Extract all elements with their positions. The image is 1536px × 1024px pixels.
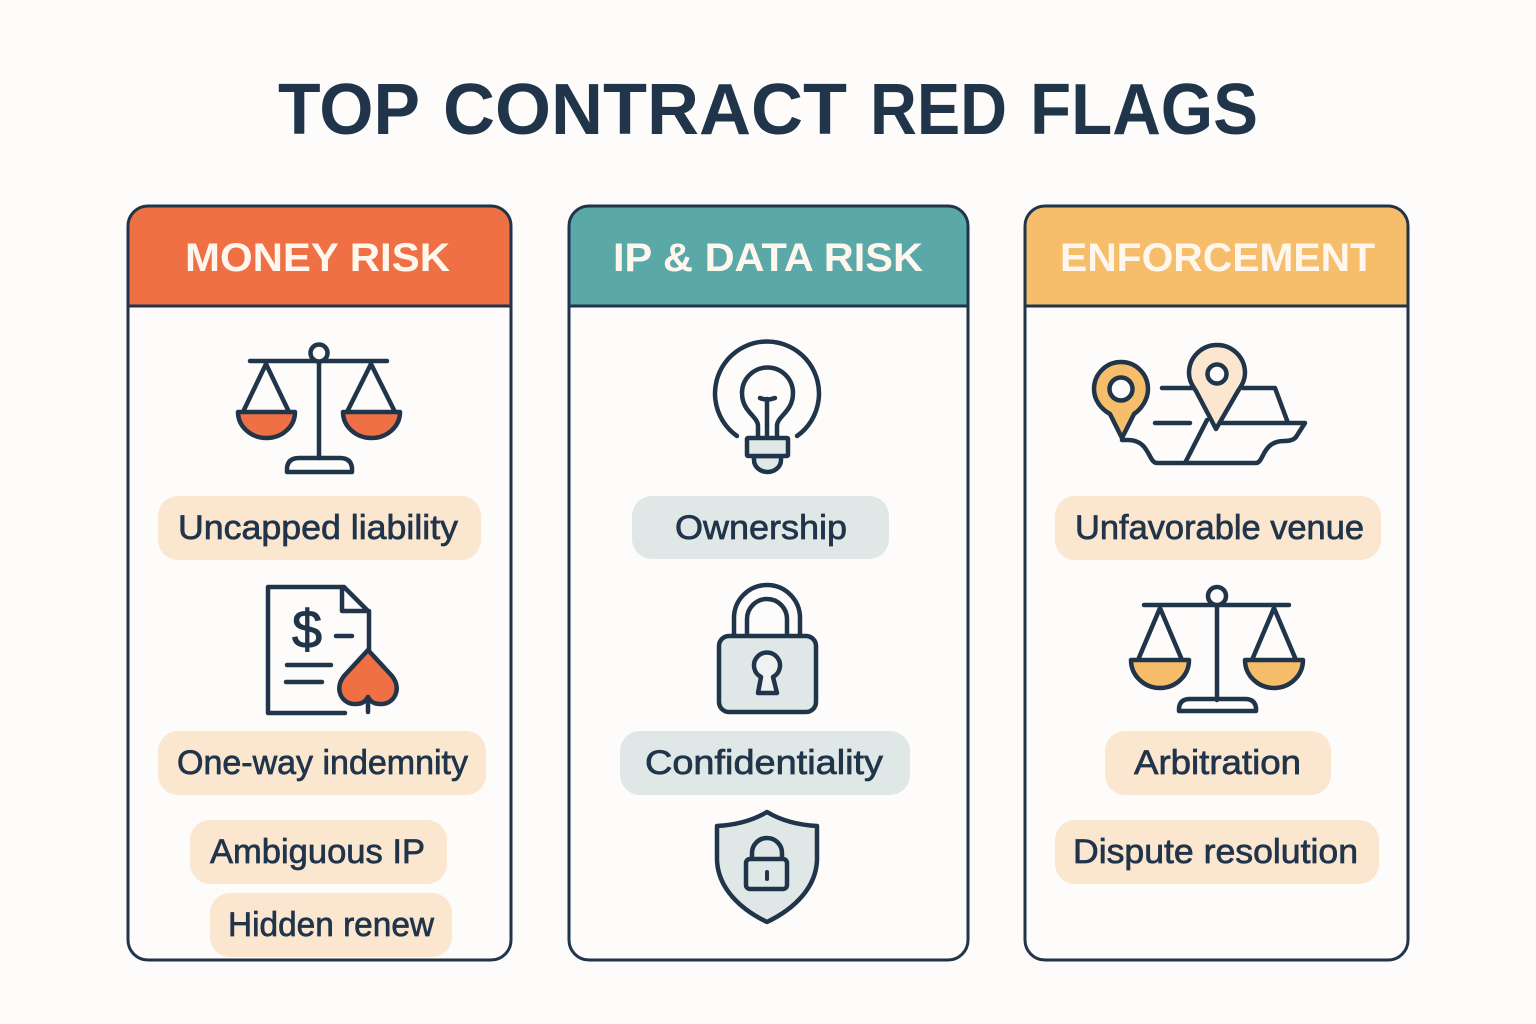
label: unfavorable venue: Unfavorable venue <box>1075 509 1364 547</box>
label: one-way indemnity: One-way indemnity <box>177 744 468 782</box>
label: confidentiality: Confidentiality <box>645 744 883 782</box>
title: CONTRACT <box>443 70 847 150</box>
label: confidentiality <box>620 731 910 795</box>
label: ambiguous IP <box>190 820 447 884</box>
label: hidden renew: Hidden renew <box>228 906 434 944</box>
icon: invoice document with spade <box>268 587 397 713</box>
label: arbitration: Arbitration <box>1134 744 1301 782</box>
header: IP and data risk <box>569 206 968 306</box>
label: one-way indemnity <box>158 731 486 795</box>
label: ownership <box>632 496 889 559</box>
label: unfavorable venue <box>1055 496 1381 560</box>
title: FLAGS <box>1030 70 1258 150</box>
label: arbitration <box>1105 731 1331 795</box>
label: dispute resolution <box>1055 820 1379 884</box>
header: enforcement: ENFORCEMENT <box>1060 236 1375 280</box>
panel: money risk <box>128 206 511 960</box>
panel: IP and data risk <box>569 206 968 960</box>
header: money risk: MONEY RISK <box>185 236 450 280</box>
icon: padlock <box>719 585 816 712</box>
header: IP and data risk: IP & DATA RISK <box>613 236 923 280</box>
panel: enforcement <box>1025 206 1408 960</box>
label: hidden renew <box>210 893 452 957</box>
icon: invoice document with spade: $ <box>292 600 322 660</box>
title <box>278 70 1258 150</box>
icon: shield with lock <box>717 812 817 922</box>
header: enforcement <box>1025 206 1408 306</box>
title: TOP <box>278 70 420 150</box>
icon: map with location pins <box>1094 345 1305 463</box>
label: uncapped liability: Uncapped liability <box>178 509 458 547</box>
icon: scales <box>1131 587 1303 711</box>
label: ownership: Ownership <box>675 509 847 547</box>
icon: light bulb <box>715 342 819 472</box>
label: ambiguous IP: Ambiguous IP <box>210 833 425 871</box>
header: money risk <box>128 206 511 306</box>
label: dispute resolution: Dispute resolution <box>1073 833 1358 871</box>
title: RED <box>870 70 1007 150</box>
label: uncapped liability <box>158 496 481 560</box>
icon: scales of justice <box>238 344 400 472</box>
